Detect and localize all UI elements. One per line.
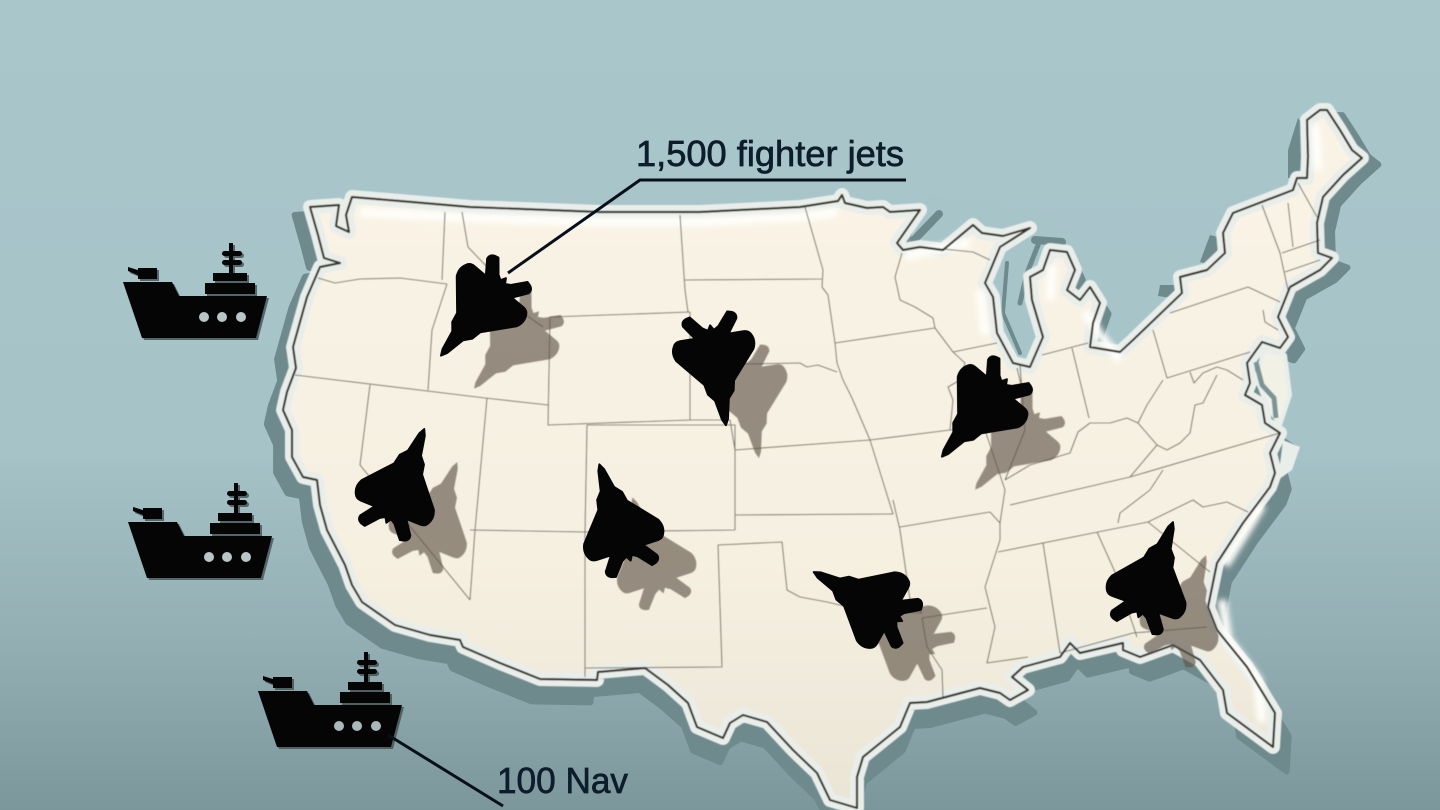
icon: jet Texas <box>794 536 932 662</box>
callout leader line: fighter jets <box>508 180 906 273</box>
icon: jet South Dakota <box>668 308 766 432</box>
Great Lakes inner shadows <box>914 214 1062 353</box>
navy ship 1 <box>123 243 269 340</box>
label: navy count: 100 Nav <box>497 760 628 801</box>
dark coastline <box>283 110 1362 808</box>
jet shadows <box>377 276 1244 695</box>
label: fighter jet count: 1,500 fighter jets <box>636 133 904 174</box>
icon: jet Illinois <box>911 344 1045 483</box>
inner coastal highlights <box>360 125 1318 722</box>
navy ship 2 <box>128 483 274 580</box>
navy ship 3 <box>258 652 404 749</box>
Outer Banks <box>1278 440 1300 480</box>
Great Lakes water <box>905 195 1070 365</box>
Delmarva peninsula <box>1256 350 1290 425</box>
icon: jet Georgia <box>1096 508 1211 641</box>
fighter jets on map <box>344 243 1211 662</box>
land with white coastal border <box>283 110 1362 808</box>
Chesapeake Bay shadow <box>1256 362 1276 418</box>
map drop shadow <box>267 115 1378 810</box>
icon: jet Nevada <box>344 414 462 548</box>
icon: jet Montana <box>410 243 544 382</box>
state borders <box>295 183 1320 697</box>
map of the contiguous United States <box>283 110 1362 808</box>
callout: navy <box>388 735 628 806</box>
callout leader line: navy <box>388 735 503 806</box>
icon: jet New Mexico <box>560 452 673 584</box>
callout: fighter jets <box>508 133 906 273</box>
